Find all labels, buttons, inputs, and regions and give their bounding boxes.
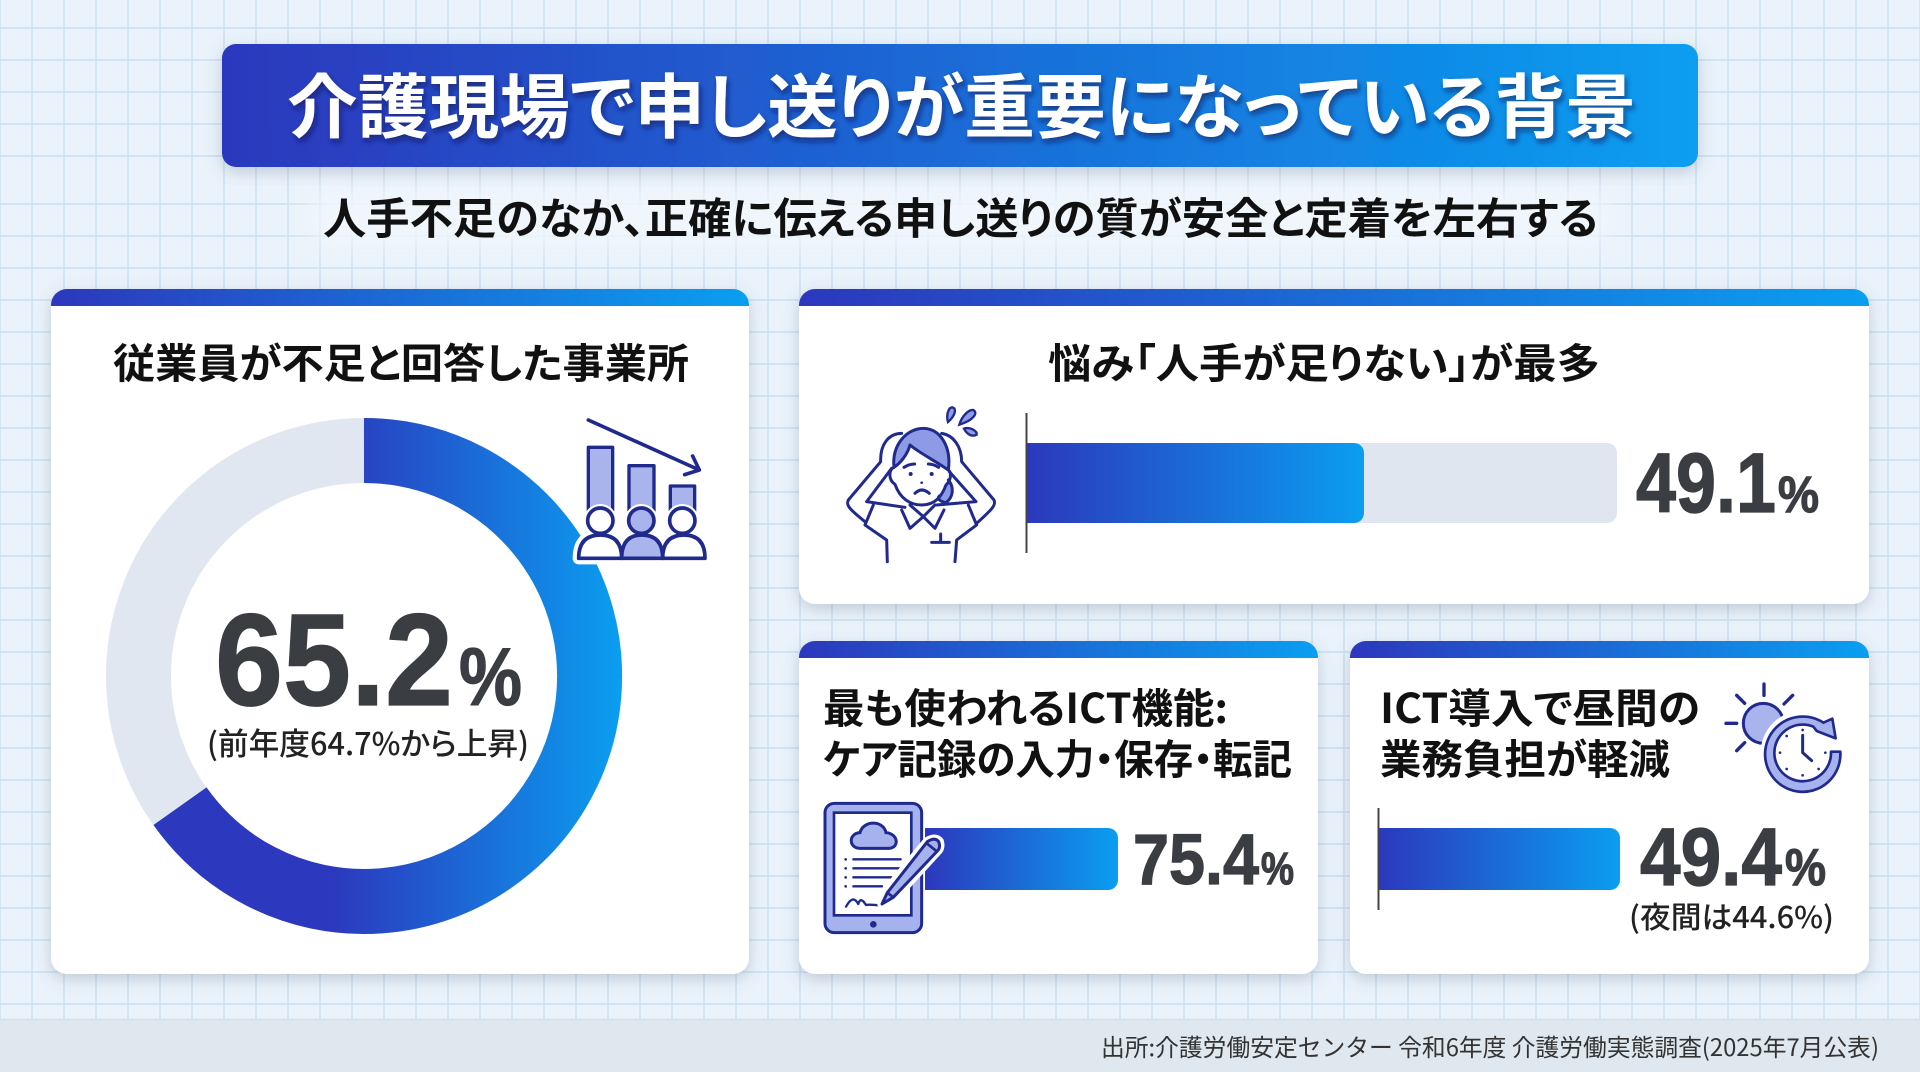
heading: daytime workload bbox=[1380, 675, 1700, 786]
bar chart 49.1% bbox=[1026, 413, 1617, 553]
donut note: (前年度64.7%から上昇) bbox=[207, 719, 529, 764]
icon: worried caregiver bbox=[848, 407, 995, 562]
source: 出所:介護労働安定センター 令和6年度 介護労働実態調査(2025年7月公表) bbox=[1101, 1028, 1879, 1063]
heading: ICT feature: 最も使われるICT機能: bbox=[823, 675, 1228, 735]
icon: sun and clock bbox=[1726, 684, 1845, 795]
donut chart 65.2% bbox=[138, 450, 590, 902]
heading: daytime workload: 業務負担が軽減 bbox=[1380, 726, 1670, 786]
footer band bbox=[0, 1019, 1920, 1072]
value 75.4%: 75.4 bbox=[1133, 821, 1259, 900]
heading: biggest worry: 悩み「人手が足りない」が最多 bbox=[1048, 330, 1600, 390]
panel: understaffed establishments bbox=[51, 289, 749, 974]
value 75.4%: % bbox=[1261, 843, 1294, 894]
heading: understaffed establishments: 従業員が不足と回答した事業所 bbox=[113, 330, 689, 390]
panel: daytime workload bbox=[1350, 641, 1869, 974]
value 49.1%: % bbox=[1778, 466, 1819, 523]
value 49.4%: 49.4 bbox=[1640, 812, 1782, 903]
icon: tablet and pen bbox=[825, 803, 940, 933]
donut value: 65.2 bbox=[215, 586, 453, 733]
heading: ICT feature bbox=[823, 675, 1292, 786]
panel: biggest worry bbox=[799, 289, 1869, 604]
night note: (夜間は44.6%) bbox=[1629, 893, 1834, 937]
bar chart 49.4% bbox=[1378, 808, 1620, 910]
value 49.4%: % bbox=[1785, 839, 1826, 897]
subtitle: 人手不足のなか、正確に伝える申し送りの質が安全と定着を左右する bbox=[323, 185, 1598, 247]
value 49.1%: 49.1 bbox=[1636, 436, 1776, 530]
donut value: % bbox=[459, 632, 522, 723]
heading: ICT feature: ケア記録の入力・保存・転記 bbox=[823, 726, 1292, 786]
bar chart 75.4% bbox=[925, 828, 1118, 890]
icon: declining staff chart bbox=[579, 420, 705, 558]
title banner: 介護現場で申し送りが重要になっている背景 bbox=[287, 52, 1636, 153]
heading: daytime workload: ICT導入で昼間の bbox=[1380, 675, 1700, 735]
panel: ICT feature bbox=[799, 641, 1318, 974]
